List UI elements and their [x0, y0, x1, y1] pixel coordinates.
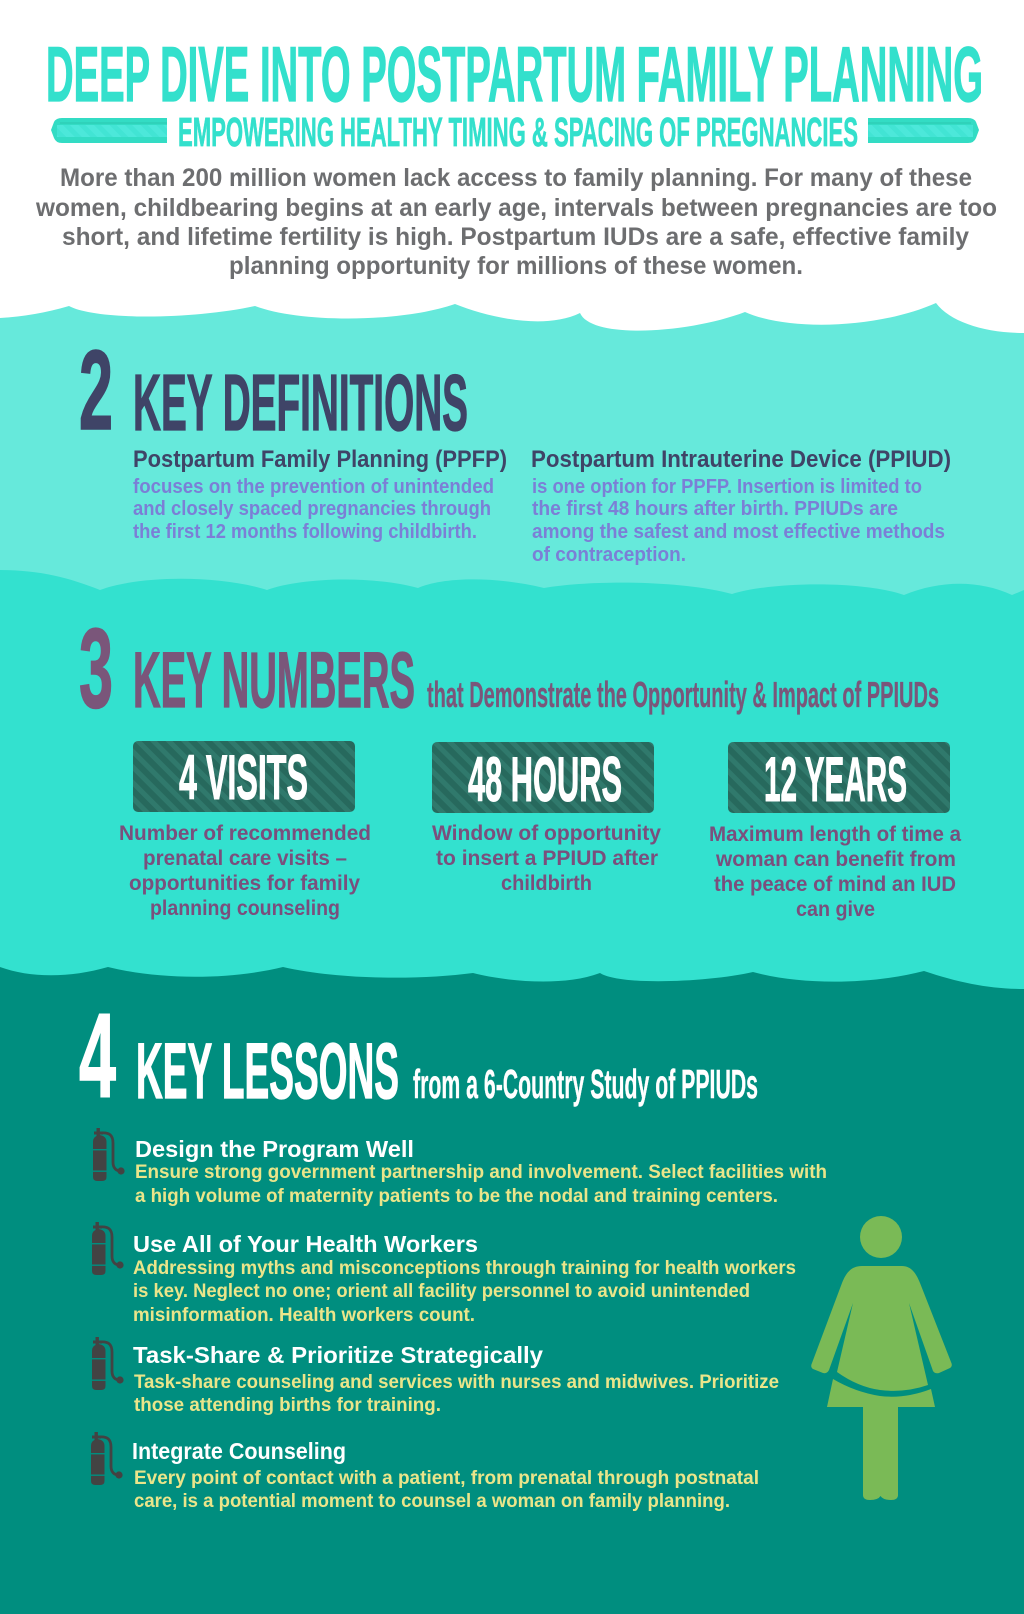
heading: 2 key definitions: 2 [79, 327, 113, 453]
stat card: 4 visits: opportunities for family [129, 871, 360, 895]
section: key definitions [79, 327, 951, 566]
lesson 4: Every point of contact with a patient, from prenatal through postnatal [134, 1467, 759, 1489]
definition: PPIUD: of contraception. [532, 544, 686, 566]
stat card: 12 years: woman can benefit from [715, 847, 956, 871]
icon: oxygen tank [92, 1337, 124, 1390]
lesson 4: Integrate Counseling [132, 1438, 346, 1464]
stat card: 4 visits: Number of recommended [119, 821, 371, 845]
lesson 2: misinformation. Health workers count. [133, 1304, 475, 1326]
lesson 1: a high volume of maternity patients to be the nodal and training centers. [135, 1185, 778, 1207]
heading: 4 key lessons: 4 [79, 989, 116, 1123]
intro paragraph: planning opportunity for millions of these women. [229, 252, 803, 280]
heading: 4 key lessons: KEY LESSONS [136, 1026, 399, 1115]
definition: PPFP: the first 12 months following childbirth. [133, 521, 477, 543]
lesson 2: Use All of Your Health Workers [133, 1231, 478, 1257]
lesson 2: Addressing myths and misconceptions through training for health workers [133, 1257, 796, 1279]
icon: oxygen tank [93, 1128, 125, 1181]
lesson 4 [91, 1432, 759, 1512]
panel: key definitions background wave [0, 303, 1024, 1000]
stat card: 12 years [709, 742, 962, 921]
panel: key lessons background wave [0, 967, 1024, 1614]
stat card: 48 hours: 48 HOURS [468, 745, 622, 815]
intro paragraph: More than 200 million women lack access to family planning. For many of these [60, 164, 972, 192]
subtitle banner [51, 109, 979, 155]
stat card: 4 visits: prenatal care visits – [143, 846, 347, 870]
decorative bar right [868, 118, 979, 143]
section: key definitions: KEY DEFINITIONS [133, 358, 468, 447]
stat card: 48 hours [432, 742, 661, 895]
heading: 2 key definitions [79, 327, 468, 453]
intro paragraph: short, and lifetime fertility is high. Postpartum IUDs are a safe, effective family [62, 223, 969, 251]
definition: PPFP: and closely spaced pregnancies through [133, 498, 491, 520]
stat card: 12 years: Maximum length of time a [709, 822, 962, 846]
panel: key numbers background wave [0, 570, 1024, 1100]
stat card: 4 visits: 4 VISITS [179, 743, 308, 813]
intro paragraph: women, childbearing begins at an early age, intervals between pregnancies are too [35, 194, 997, 222]
heading: 4 key lessons [79, 989, 758, 1123]
lesson 2 [92, 1222, 796, 1326]
lesson 3: those attending births for training. [134, 1394, 441, 1416]
heading: 3 key numbers: KEY NUMBERS [133, 635, 415, 724]
definition: PPIUD [531, 446, 951, 566]
icon: woman figure [811, 1216, 952, 1500]
stat card: 48 hours: to insert a PPIUD after [436, 846, 659, 870]
lesson 1: Design the Program Well [135, 1136, 414, 1162]
definition: PPIUD: among the safest and most effective methods [532, 521, 945, 543]
lesson 4: care, is a potential moment to counsel a woman on family planning. [134, 1490, 730, 1512]
stat card: 12 years: can give [796, 897, 875, 921]
heading: 3 key numbers: 3 [79, 605, 113, 731]
definition: PPFP: focuses on the prevention of unintended [133, 476, 494, 498]
definition: PPIUD: Postpartum Intrauterine Device (PPIUD) [531, 446, 951, 473]
lesson 2: is key. Neglect no one; orient all facility personnel to avoid unintended [133, 1280, 750, 1302]
definition: PPFP: Postpartum Family Planning (PPFP) [133, 446, 507, 473]
section: key lessons [79, 989, 952, 1512]
intro paragraph [35, 164, 997, 280]
stat card: 48 hours: Window of opportunity [432, 821, 661, 845]
lesson 1 [93, 1128, 827, 1207]
definition: PPIUD: the first 48 hours after birth. PPIUDs are [532, 498, 898, 520]
icon: oxygen tank [92, 1222, 124, 1275]
stat card: 48 hours: childbirth [501, 871, 592, 895]
lesson 3: Task-share counseling and services with nurses and midwives. Prioritize [134, 1371, 779, 1393]
stat card: 12 years: the peace of mind an IUD [714, 872, 956, 896]
section: key numbers [79, 605, 962, 921]
icon: oxygen tank [91, 1432, 123, 1485]
lesson 1: Ensure strong government partnership and involvement. Select facilities with [135, 1161, 827, 1183]
lesson 3: Task-Share & Prioritize Strategically [133, 1342, 543, 1368]
stat card: 4 visits: planning counseling [150, 896, 340, 920]
definition: PPIUD: is one option for PPFP. Insertion is limited to [532, 476, 922, 498]
stat card: 4 visits [119, 741, 371, 920]
decorative bar left [51, 118, 167, 143]
definition: PPFP [133, 446, 507, 543]
heading: 3 key numbers [79, 605, 939, 731]
lesson 3 [92, 1337, 779, 1416]
